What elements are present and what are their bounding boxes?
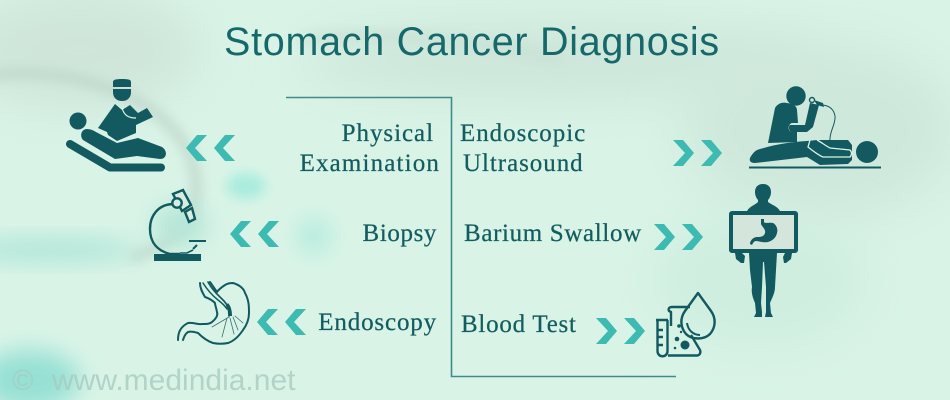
icon: body x-ray with stomach xyxy=(731,184,796,317)
label: Ultrasound: Ultrasound xyxy=(463,150,584,177)
icon: microscope xyxy=(150,190,206,260)
right arrows: barium swallow xyxy=(654,224,703,250)
icon: endoscopic ultrasound xyxy=(749,86,881,168)
right arrows: blood test xyxy=(596,318,645,344)
label: Blood Test: Blood Test xyxy=(461,311,577,338)
label: Examination: Examination xyxy=(300,150,440,177)
left arrows: physical examination xyxy=(186,135,235,161)
label: Endoscopy: Endoscopy xyxy=(318,309,437,336)
icon: flask, test tube and blood drop xyxy=(656,293,715,356)
left arrows: endoscopy xyxy=(257,309,306,335)
icon: stomach endoscopy xyxy=(178,282,249,344)
title: Stomach Cancer Diagnosis xyxy=(224,20,720,64)
watermark: © xyxy=(12,365,33,397)
label: Endoscopic: Endoscopic xyxy=(460,120,586,147)
left arrows: biopsy xyxy=(230,221,279,247)
label: Barium Swallow: Barium Swallow xyxy=(464,220,642,247)
label: Physical: Physical xyxy=(342,120,434,147)
icon: doctor examining patient xyxy=(70,79,166,168)
divider lines xyxy=(286,98,676,376)
label: Biopsy: Biopsy xyxy=(363,220,437,247)
watermark: www.medindia.net xyxy=(51,364,296,397)
right arrows: endoscopic ultrasound xyxy=(673,140,722,166)
